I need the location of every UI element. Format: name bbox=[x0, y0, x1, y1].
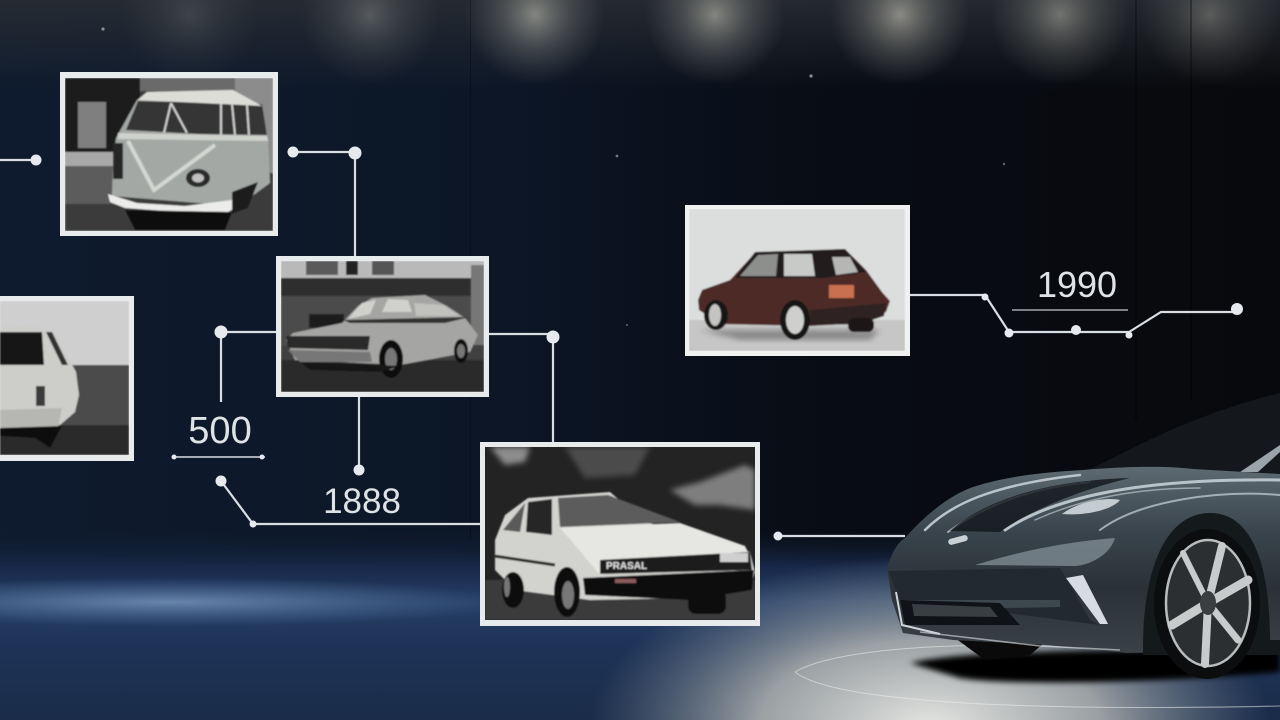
photo: 1980s coupe bbox=[276, 256, 489, 397]
car LED light bbox=[1066, 575, 1108, 624]
year label: 1990: 1990 bbox=[1037, 264, 1117, 305]
photo: white hatchback bbox=[480, 442, 760, 626]
car roof and glass bbox=[1085, 393, 1280, 475]
hero: modern concept car bbox=[887, 393, 1280, 682]
front tyre bbox=[958, 640, 1042, 658]
wheel arch bbox=[1143, 513, 1280, 655]
car bumper and grille bbox=[888, 568, 1100, 625]
photo: station wagon cropped at left bbox=[0, 296, 134, 461]
photo: brown hatchback bbox=[685, 205, 910, 356]
year label: 1888: 1888 bbox=[323, 482, 401, 521]
floor: blue stage with spotlight bbox=[0, 530, 1280, 720]
car shadow bbox=[910, 650, 1280, 682]
photo: vintage van bbox=[60, 72, 278, 236]
year label: 500: 500 bbox=[188, 410, 252, 452]
connector lines and nodes bbox=[0, 146, 1243, 540]
hood highlights bbox=[925, 475, 1280, 532]
car body bbox=[887, 467, 1280, 653]
photo: white hatchback: PRASAL bbox=[606, 561, 647, 572]
wheel bbox=[1154, 529, 1260, 679]
